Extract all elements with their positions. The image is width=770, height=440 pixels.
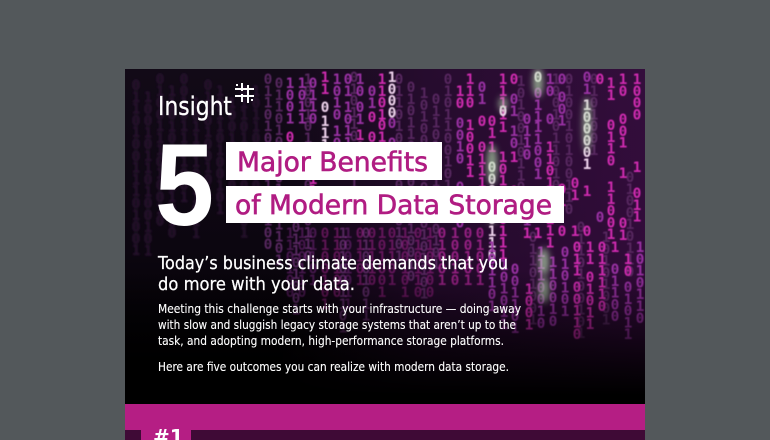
binary rain background: 0 <box>364 110 380 122</box>
binary rain background: 01 <box>615 216 631 240</box>
binary rain background: 0 <box>542 112 558 124</box>
lower rows: 1001011 <box>340 226 356 309</box>
binary rain background: 01 <box>567 176 583 200</box>
binary rain background: 001 <box>554 90 570 126</box>
binary rain background: 0110 <box>484 212 500 259</box>
binary rain background: 0101 <box>374 118 390 165</box>
binary rain background: 1 <box>579 184 595 196</box>
lower rows: 101011 <box>496 258 512 329</box>
binary rain background: 101001101 <box>335 226 351 332</box>
lower rows: 00110 <box>569 280 585 339</box>
binary rain background: 01 <box>474 80 490 104</box>
binary rain background: 10 <box>352 72 368 96</box>
binary rain background: 0110100110100101 <box>391 72 407 261</box>
binary rain background: 0110 <box>452 180 468 227</box>
lower rows: 001101 <box>507 262 523 333</box>
binary rain background: 0110 <box>603 118 619 165</box>
binary rain background: 1111 <box>542 200 558 247</box>
binary rain background: 1111 <box>495 72 511 119</box>
binary rain background: 0110100101101 <box>236 84 252 238</box>
binary rain background: 011 <box>282 130 298 166</box>
lower rows: 0100101 <box>317 226 333 309</box>
lower rows: 110100 <box>422 226 438 297</box>
lower rows: 01110 <box>364 226 380 285</box>
binary rain background: 0 <box>506 72 522 84</box>
body paragraph: task, and adopting modern, high-performance storage platforms. <box>158 333 504 348</box>
binary rain background: 0111 <box>495 212 511 259</box>
binary rain background: 101101001011 <box>188 96 204 238</box>
binary rain background: 1011 <box>294 76 310 123</box>
binary rain background: 01 <box>352 100 368 124</box>
lower rows: 01101 <box>352 226 368 285</box>
binary rain background: 10 <box>452 84 468 108</box>
binary rain background: 10011 <box>462 118 478 177</box>
binary rain background: 01 <box>506 92 522 116</box>
binary rain background: 11 <box>603 76 619 100</box>
binary rain background: 10 <box>542 72 558 96</box>
lower rows: 110010 <box>545 255 561 326</box>
binary rain background: 1010 <box>352 128 368 175</box>
binary rain background: 1101001011010 <box>164 84 180 238</box>
binary rain background: 100001 <box>579 98 595 169</box>
binary rain background <box>125 67 648 404</box>
binary rain background: 11001 <box>603 180 619 239</box>
binary rain background: 0001 <box>484 160 500 207</box>
binary rain background: 1 <box>506 150 522 162</box>
body paragraph: with slow and sluggish legacy storage systems that aren’t up to the <box>158 317 516 332</box>
binary rain background: 0 <box>384 116 400 128</box>
document card <box>125 67 648 440</box>
binary rain background: 10 <box>615 72 631 96</box>
subheading <box>157 253 508 295</box>
binary rain background: 0 <box>495 104 511 116</box>
lower rows: 1110010 <box>533 245 549 328</box>
binary rain background: 001 <box>615 112 631 148</box>
binary rain background: 10110 <box>340 100 356 159</box>
lower rows: 010110 <box>410 226 426 297</box>
binary rain background: 0 <box>592 72 608 84</box>
bottom fade <box>286 276 645 394</box>
binary rain background: 1011001001 <box>248 84 264 202</box>
binary rain background: 1001011010 <box>548 72 564 190</box>
lower rows: 011110 <box>594 240 610 311</box>
binary rain background: 011 <box>506 184 522 220</box>
binary rain background: 01 <box>364 84 380 108</box>
binary rain background: 1 <box>495 120 511 132</box>
binary rain background: 1 <box>629 160 645 172</box>
binary rain background: 11001 <box>530 120 546 179</box>
green-white glows <box>487 67 591 303</box>
big number 5: 5 <box>155 119 214 250</box>
binary rain background: 01 <box>554 182 570 206</box>
binary rain background: 00101101001 <box>176 72 192 202</box>
binary rain background: 1 <box>615 166 631 178</box>
binary rain background: 11 <box>530 190 546 214</box>
binary rain background: 01001011 <box>358 226 374 321</box>
lower rows: 10 <box>620 252 636 276</box>
binary rain background: 10101001 <box>598 230 614 325</box>
binary rain background: 0101101001 <box>346 70 362 188</box>
binary rain background: 0 <box>474 114 490 126</box>
binary rain background: 0001 <box>364 130 380 177</box>
binary rain background: 01110 <box>474 140 490 199</box>
lower rows: 01011 <box>620 280 636 339</box>
binary rain background: 0101001 <box>586 72 602 155</box>
lower rows: 010101 <box>557 245 573 316</box>
binary rain background: 01101001 <box>288 220 304 315</box>
binary rain background: 0110 <box>305 76 321 123</box>
binary rain background: 011 <box>629 186 645 222</box>
lower rows: 101101 <box>484 240 500 311</box>
binary rain background: 010010110 <box>622 170 638 276</box>
lower rows: 100110 <box>294 226 310 297</box>
binary rain background: 0 <box>592 210 608 222</box>
binary rain background: 0110 <box>519 112 535 159</box>
binary rain background: 0 <box>384 136 400 148</box>
binary rain background: 1000 <box>629 72 645 119</box>
binary rain background: 1 <box>484 140 500 152</box>
lower rows: 10010 <box>447 226 463 285</box>
binary rain background: 0 <box>579 224 595 236</box>
title line 1: Major Benefits <box>237 147 428 178</box>
binary rain background: 1001011010010110 <box>300 72 316 261</box>
lower rows: 110100 <box>282 226 298 297</box>
binary rain background: 10010110100101 <box>140 90 156 255</box>
lower rows: 1010110 <box>632 240 648 323</box>
binary rain background: 1011 <box>329 124 345 171</box>
binary rain background: 0 <box>317 100 333 112</box>
binary rain background: 011010110100101 <box>428 92 444 269</box>
lower rows: 01001 <box>434 226 450 285</box>
binary rain background: 110 <box>462 72 478 108</box>
logo: Insight: Insight <box>158 92 232 122</box>
lower rows: 01100 <box>607 262 623 321</box>
lower rows: 01011 <box>582 270 598 329</box>
binary rain background: 10110100101 <box>212 84 228 214</box>
binary rain background: 0110100101001101 <box>271 76 287 265</box>
binary rain background: 1010 <box>329 72 345 119</box>
binary rain background: 01 <box>579 70 595 94</box>
binary rain background: 101001110100101101 <box>416 86 432 299</box>
binary rain background: 101001011001 <box>513 74 529 216</box>
binary rain background: 11 <box>317 70 333 94</box>
subheading: Today’s business climate demands that you <box>157 253 508 274</box>
closing line: Here are five outcomes you can realize with modern data storage. <box>158 359 509 374</box>
binary rain background: 1001011010 <box>224 96 240 214</box>
subheading: do more with your data. <box>158 274 355 295</box>
lower rows <box>282 226 648 339</box>
lower rows: 110100 <box>329 226 345 297</box>
binary rain background: 101 <box>519 190 535 226</box>
binary rain background: 10101 <box>495 150 511 209</box>
binary rain background: 1111 <box>317 114 333 161</box>
title line 2: of Modern Data Storage <box>235 190 552 221</box>
binary rain background: 10 <box>506 124 522 148</box>
binary rain background: 011010011101001 <box>128 78 144 255</box>
lower rows: 011 <box>569 240 585 276</box>
binary rain background: 0 <box>530 70 546 82</box>
binary rain background: 1 <box>530 226 546 238</box>
binary rain background: 1 <box>519 226 535 238</box>
lower rows: 00101 <box>460 226 476 285</box>
near layer: 1001 <box>282 76 298 123</box>
lower rows: 11 <box>582 240 598 264</box>
logo mark <box>235 83 254 103</box>
binary rain background: 01 <box>340 72 356 96</box>
body paragraph: Meeting this challenge starts with your infrastructure — doing away <box>158 301 522 316</box>
lower rows: 01101 <box>305 226 321 285</box>
binary rain background: 1101 <box>374 72 390 119</box>
binary rain background: 0010 <box>452 116 468 163</box>
binary rain background: 011 <box>305 160 321 196</box>
lower rows: 01101 <box>384 226 400 285</box>
binary rain background: 1101 <box>542 140 558 187</box>
binary rain background: 0110100101 <box>200 78 216 196</box>
binary rain background: 010010100110 <box>561 72 577 214</box>
lower rows: 1 <box>607 240 623 252</box>
section band: #1 <box>125 404 645 440</box>
far layer: 011010010110100 <box>260 72 276 249</box>
binary rain background: 011 <box>530 86 546 122</box>
lower rows: 01001 <box>472 226 488 285</box>
lower rows: 101001 <box>374 226 390 297</box>
body paragraph <box>158 301 522 348</box>
binary rain background: 0100111010010 <box>152 72 168 226</box>
binary rain background: 1000 <box>384 70 400 117</box>
binary rain background: 0110100101 <box>573 220 589 338</box>
binary rain background: 0101100101 <box>440 72 456 190</box>
lower rows: 1001 <box>521 282 537 329</box>
binary rain background: 1 <box>567 224 583 236</box>
binary rain background: 0 <box>554 72 570 84</box>
binary rain background: 01 <box>484 114 500 138</box>
binary rain background: 01011010011010010 <box>403 80 419 281</box>
binary rain background: 0 <box>554 224 570 236</box>
binary rain background: 01101001 <box>525 230 541 325</box>
lower rows: 100101 <box>397 226 413 297</box>
